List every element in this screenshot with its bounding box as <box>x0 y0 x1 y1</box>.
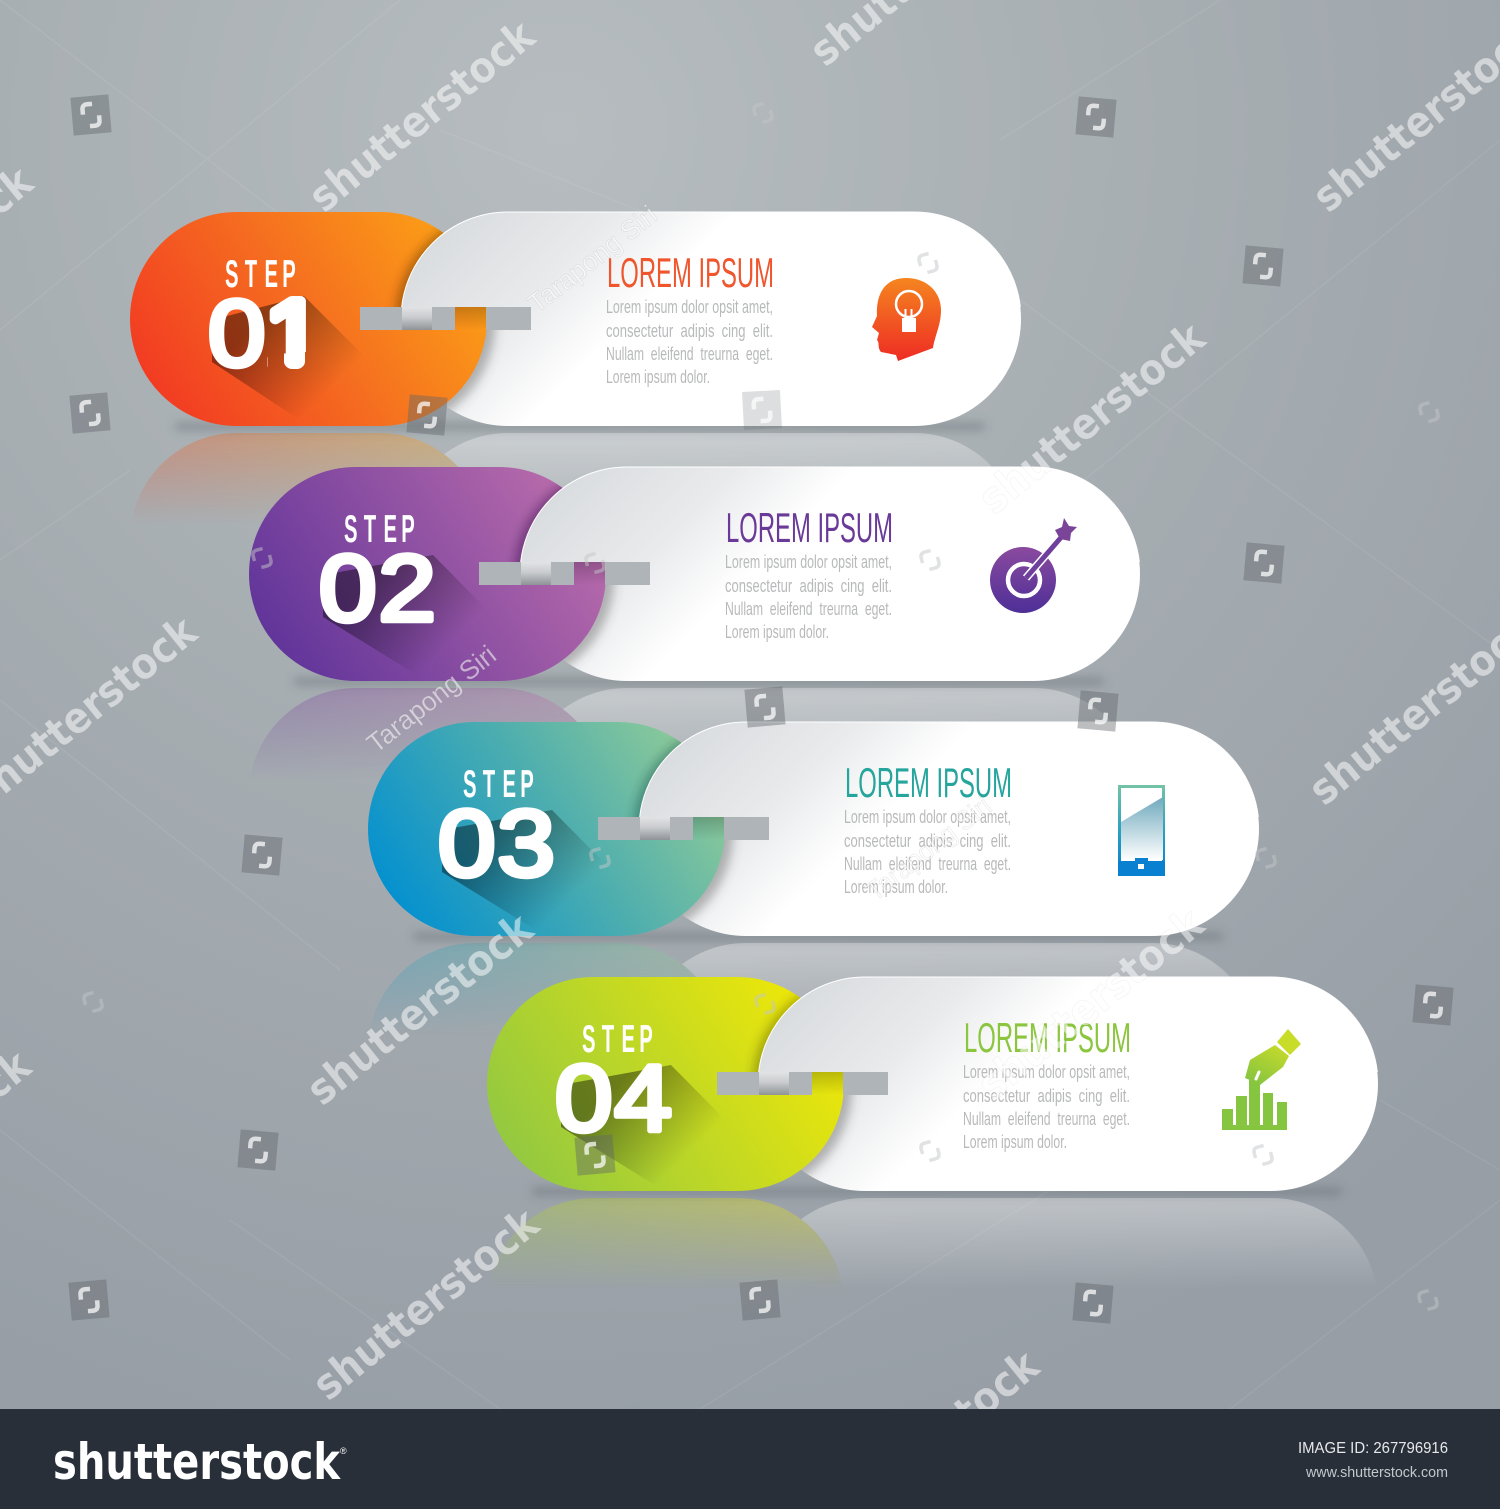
number: 02: 02 <box>319 536 436 640</box>
watermarks: Tarapong Siri <box>522 200 663 319</box>
icon: target with dart <box>990 518 1077 613</box>
colored pill: step 03 <box>368 722 725 936</box>
reflection: step 01 <box>134 433 992 510</box>
colored pill: step 04 <box>487 977 844 1191</box>
number: 03: 03 <box>438 791 555 895</box>
white fold shadow: step 04 <box>746 993 800 1072</box>
step 01 card <box>130 212 1021 647</box>
colored pill shadow: step 04 <box>801 1095 857 1177</box>
step 03 card <box>368 722 1259 1157</box>
white pill: step 01 <box>401 212 1021 426</box>
body text: 02 <box>725 552 892 642</box>
slit strip: step 01 <box>360 307 531 330</box>
slit strip: step 04 <box>717 1072 888 1095</box>
watermarks: shutterstock <box>968 898 1215 1111</box>
reflection: step 03 <box>372 943 1230 1020</box>
image id: IMAGE ID: 267796916 <box>1298 1440 1448 1457</box>
heading: 02: LOREM IPSUM <box>726 504 893 551</box>
footer bar <box>0 1409 1500 1509</box>
white pill: step 03 <box>639 722 1259 936</box>
body text: 04 <box>963 1062 1130 1152</box>
upper white flap: step 02 <box>520 466 1140 562</box>
ground shadow: step 01 <box>175 423 985 430</box>
watermarks: Tarapong Siri <box>860 791 997 907</box>
icon: hand placing bar chart <box>1222 1029 1301 1130</box>
ground shadow: step 04 <box>532 1188 1342 1195</box>
colored pill: step 01 <box>130 212 487 426</box>
body text: 03 <box>844 807 1011 897</box>
upper white flap: step 01 <box>401 212 1021 307</box>
step 04 card <box>487 977 1378 1412</box>
icon: smartphone <box>1118 786 1165 875</box>
website: www.shutterstock.com <box>1305 1464 1448 1481</box>
white fold shadow: step 01 <box>390 228 444 307</box>
body text: 03: consectetur adipis cing elit. <box>844 831 1011 851</box>
colored pill: step 02 <box>249 467 606 681</box>
heading: 01: LOREM IPSUM <box>607 249 774 296</box>
body text: 02: consectetur adipis cing elit. <box>725 576 892 596</box>
colored pill shadow: step 03 <box>682 840 738 922</box>
footer logo: shutterstock <box>53 1433 341 1491</box>
number: 04: 04 <box>555 1046 672 1150</box>
step label: 04: STEP <box>582 1017 653 1061</box>
body text: 01 <box>606 297 773 387</box>
registered mark: ® <box>340 1446 347 1456</box>
long number shadow: step 03 <box>442 810 596 925</box>
slit strip: step 03 <box>598 817 769 840</box>
body text: 01: consectetur adipis cing elit. <box>606 321 773 341</box>
white fold shadow: step 03 <box>628 738 682 817</box>
step label: 03: STEP <box>463 762 534 806</box>
long number shadow: step 01 <box>212 296 358 415</box>
icon: head with light bulb <box>872 278 941 361</box>
body text: 02: Lorem ipsum dolor opsit amet, <box>725 552 892 572</box>
upper white flap: step 03 <box>639 722 1259 817</box>
watermarks: Tarapong Siri <box>361 640 502 759</box>
body text: 04: Lorem ipsum dolor opsit amet, <box>963 1062 1130 1082</box>
upper white flap: step 04 <box>758 976 1378 1072</box>
body text: 01: Lorem ipsum dolor. <box>606 367 710 387</box>
colored pill shadow: step 01 <box>444 330 500 412</box>
heading: 03: LOREM IPSUM <box>845 759 1012 806</box>
white pill: step 04 <box>758 977 1378 1191</box>
number: 01: 01 <box>208 281 323 385</box>
step label: 01: STEP <box>225 252 296 296</box>
step label: 02: STEP <box>344 507 415 551</box>
ground shadow: step 03 <box>413 933 1223 940</box>
white pill: step 02 <box>520 467 1140 681</box>
slit strip: step 02 <box>479 562 650 585</box>
body text: 02: Lorem ipsum dolor. <box>725 622 829 642</box>
watermarks: shutterstock <box>297 903 544 1116</box>
reflection: step 04 <box>492 1198 1371 1278</box>
long number shadow: step 02 <box>323 555 477 668</box>
body text: 04: Nullam eleifend treurna eget. <box>963 1109 1130 1129</box>
body text: 04: consectetur adipis cing elit. <box>963 1086 1130 1106</box>
body text: 03: Lorem ipsum dolor. <box>844 877 948 897</box>
ground shadow: step 02 <box>294 678 1104 685</box>
white fold shadow: step 02 <box>510 483 562 562</box>
step 02 card <box>249 467 1140 902</box>
colored pill shadow: step 02 <box>563 585 619 667</box>
heading: 04: LOREM IPSUM <box>964 1014 1131 1061</box>
long number shadow: step 04 <box>561 1065 717 1180</box>
body text: 03: Lorem ipsum dolor opsit amet, <box>844 807 1011 827</box>
watermarks: shutterstock <box>969 312 1216 525</box>
body text: 03: Nullam eleifend treurna eget. <box>844 854 1011 874</box>
reflection: step 02 <box>254 688 1110 762</box>
body text: 01: Nullam eleifend treurna eget. <box>606 344 773 364</box>
body text: 01: Lorem ipsum dolor opsit amet, <box>606 297 773 317</box>
body text: 02: Nullam eleifend treurna eget. <box>725 599 892 619</box>
body text: 04: Lorem ipsum dolor. <box>963 1132 1067 1152</box>
watermarks: shutterstock <box>303 1198 550 1411</box>
